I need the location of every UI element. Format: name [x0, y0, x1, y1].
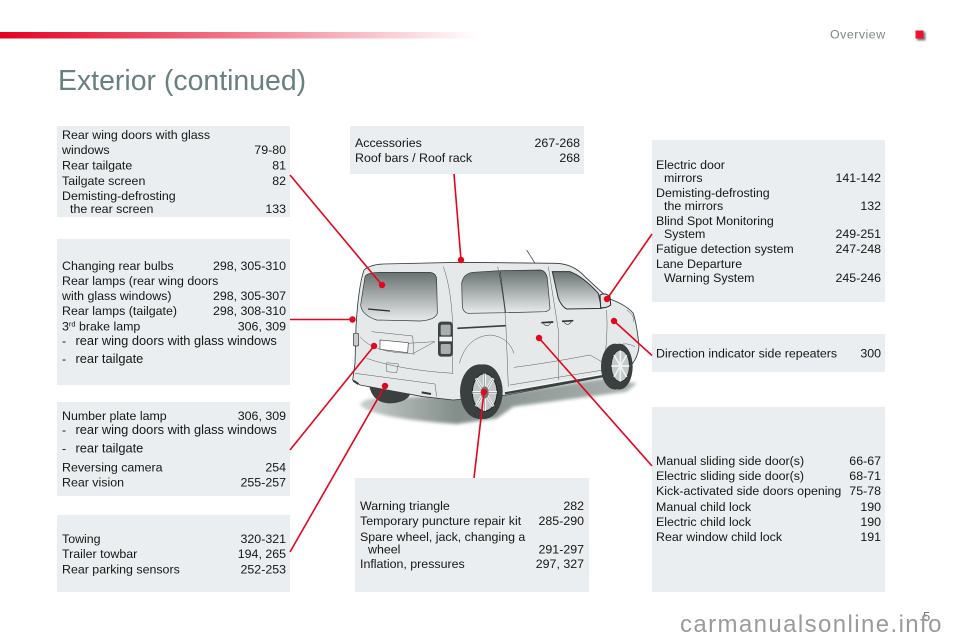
door mirror [600, 294, 611, 308]
panel: direction indicators: Direction indicator side repeaters [656, 346, 837, 360]
panel: rear bulbs: 298, 305-310 [213, 259, 286, 273]
rear wheel [460, 364, 503, 419]
rear window [361, 272, 437, 321]
panel: rear bulbs: rd [69, 320, 76, 328]
bumper sensors [353, 381, 431, 394]
panel: mirrors and driver aids: the mirrors [664, 199, 723, 213]
callout: roof [454, 174, 464, 263]
panel: number plate lamp and camera: 306, 309 [238, 409, 286, 423]
panel: accessories [350, 126, 584, 174]
panel: side doors and child locks [652, 407, 885, 592]
panel: mirrors and driver aids: Demisting-defrosting [656, 186, 770, 200]
panel: side doors and child locks: 68-71 [849, 469, 881, 483]
panel: side doors and child locks: 191 [860, 530, 881, 544]
panel: number plate lamp and camera: Number plate lamp [62, 409, 167, 423]
panel: rear bulbs: Rear lamps (tailgate) [62, 304, 177, 318]
tail lamp [438, 322, 453, 357]
panel: accessories: Roof bars / Roof rack [355, 151, 473, 165]
panel: rear doors and tailgate: Tailgate screen [62, 174, 145, 188]
panel: rear bulbs: Rear lamps (rear wing doors [62, 274, 218, 288]
sill [505, 376, 603, 393]
panel: rear bulbs: rear tailgate [76, 351, 143, 366]
antenna [527, 250, 535, 263]
callout: rear lamps [290, 316, 356, 323]
page number: 5 [923, 609, 930, 624]
door handles [541, 321, 573, 326]
side trim strip [457, 326, 506, 328]
panel: accessories: 268 [559, 151, 580, 165]
panel: number plate lamp and camera: 255-257 [241, 476, 286, 490]
body lines [355, 267, 635, 397]
panel: warning triangle and wheels: Spare wheel, jack, changing a [360, 530, 525, 544]
panel: side doors and child locks: 66-67 [849, 454, 881, 468]
panel: mirrors and driver aids: Lane Departure [656, 257, 742, 271]
panel: number plate lamp and camera: Reversing camera [62, 460, 163, 474]
panel: rear bulbs [57, 239, 290, 385]
panel: side doors and child locks: Manual sliding side door(s) [656, 454, 804, 468]
callout: number plate [290, 343, 377, 450]
panel: accessories: Accessories [355, 136, 422, 150]
callout: rear window [290, 175, 385, 288]
van illustration [353, 250, 639, 424]
panel: side doors and child locks: Electric child lock [656, 515, 752, 529]
panel: mirrors and driver aids: 247-248 [836, 242, 881, 256]
panel: number plate lamp and camera [57, 402, 290, 496]
panel: rear doors and tailgate: 133 [265, 202, 286, 216]
panel: mirrors and driver aids: mirrors [664, 171, 703, 185]
panel: accessories: 267-268 [535, 136, 580, 150]
callout: side repeater [611, 318, 652, 356]
panel: towing: Rear parking sensors [62, 562, 180, 576]
panel: rear bulbs: 306, 309 [238, 320, 286, 334]
panel: number plate lamp and camera: 254 [265, 460, 286, 474]
panel: mirrors and driver aids: Electric door [656, 158, 725, 172]
panel: mirrors and driver aids: Warning System [664, 271, 754, 285]
far rear wheel [369, 387, 411, 403]
panel: rear bulbs: with glass windows) [61, 289, 172, 303]
panel: towing: Trailer towbar [62, 547, 137, 561]
panel: warning triangle and wheels: 285-290 [539, 514, 584, 528]
section label: Overview: Overview [830, 28, 886, 42]
header gradient bar [0, 32, 478, 38]
van body [353, 262, 639, 400]
panel: rear doors and tailgate: 81 [272, 158, 286, 172]
panel: warning triangle and wheels: 282 [563, 499, 584, 513]
watermark: carmanualsonline.info [680, 611, 943, 638]
panel: rear doors and tailgate [57, 126, 290, 217]
panel: number plate lamp and camera: - [62, 423, 66, 437]
panel: side doors and child locks: 190 [860, 515, 881, 529]
panel: number plate lamp and camera: rear wing doors with glass windows [76, 422, 277, 437]
panel: rear bulbs: 3 [62, 320, 69, 334]
rear edge lamp [353, 333, 359, 346]
panel: number plate lamp and camera: Rear vision [62, 476, 124, 490]
callout: wheel [474, 389, 487, 478]
panel: mirrors and driver aids: 132 [860, 199, 881, 213]
panel: warning triangle and wheels: 291-297 [539, 542, 584, 556]
panel: rear bulbs: Changing rear bulbs [62, 259, 174, 273]
side window sliding door [500, 270, 550, 313]
panel: mirrors and driver aids: Blind Spot Monitoring [656, 214, 774, 228]
panel: mirrors and driver aids [652, 140, 885, 302]
panel: warning triangle and wheels: wheel [367, 542, 400, 556]
panel: rear doors and tailgate: windows [61, 143, 110, 157]
panel: towing [57, 515, 290, 592]
ground shadow [360, 378, 637, 424]
panel: towing: 252-253 [241, 562, 286, 576]
side window rear [462, 271, 506, 313]
panel: towing: 194, 265 [238, 547, 286, 561]
panel: rear doors and tailgate: 82 [272, 174, 286, 188]
panel: towing: Towing [62, 532, 101, 546]
panel: side doors and child locks: 75-78 [849, 484, 881, 498]
panel: number plate lamp and camera: - [62, 442, 66, 456]
panel: rear doors and tailgate: 79-80 [254, 143, 286, 157]
panel: rear doors and tailgate: Demisting-defrosting [62, 189, 176, 203]
panel: rear doors and tailgate: the rear screen [70, 202, 153, 216]
panel: rear bulbs: brake lamp [76, 320, 140, 334]
panel: warning triangle and wheels: Warning triangle [360, 499, 450, 513]
panel: rear bulbs: rear wing doors with glass windows [76, 333, 277, 348]
panel: rear bulbs: - [62, 352, 66, 366]
panel: rear bulbs: 298, 308-310 [213, 304, 286, 318]
front window [552, 272, 602, 309]
panel: direction indicators [652, 334, 885, 372]
panel: rear bulbs: 298, 305-307 [213, 289, 286, 303]
callout: door mirror [604, 234, 652, 302]
panel: warning triangle and wheels [355, 478, 589, 592]
callout: towing [290, 383, 388, 552]
panel: mirrors and driver aids: 249-251 [836, 227, 881, 241]
title: Exterior (continued) [58, 65, 306, 97]
panel: mirrors and driver aids: Fatigue detection system [656, 242, 794, 256]
panel: side doors and child locks: Kick-activated side doors opening [656, 484, 841, 498]
callout: sliding door [536, 335, 652, 466]
panel: mirrors and driver aids: 245-246 [836, 271, 881, 285]
panel: rear doors and tailgate: Rear wing doors with glass [62, 128, 210, 142]
icon: red square marker [916, 30, 926, 40]
front wheel [601, 344, 633, 390]
panel: mirrors and driver aids: System [664, 227, 705, 241]
panel: mirrors and driver aids: 141-142 [836, 171, 881, 185]
panel: towing: 320-321 [241, 532, 286, 546]
panel: direction indicators: 300 [860, 346, 881, 360]
panel: side doors and child locks: Manual child lock [656, 500, 752, 514]
panel: warning triangle and wheels: Temporary puncture repair kit [360, 514, 522, 528]
panel: side doors and child locks: Rear window child lock [656, 530, 783, 544]
number plate [380, 340, 408, 353]
panel: rear doors and tailgate: Rear tailgate [62, 158, 132, 172]
panel: warning triangle and wheels: Inflation, pressures [360, 557, 465, 571]
panel: side doors and child locks: 190 [860, 500, 881, 514]
panel: warning triangle and wheels: 297, 327 [536, 557, 584, 571]
panel: side doors and child locks: Electric sliding side door(s) [656, 469, 804, 483]
panel: number plate lamp and camera: rear tailgate [76, 440, 143, 456]
panel: rear bulbs: - [62, 334, 66, 348]
rear wiper [368, 309, 390, 311]
